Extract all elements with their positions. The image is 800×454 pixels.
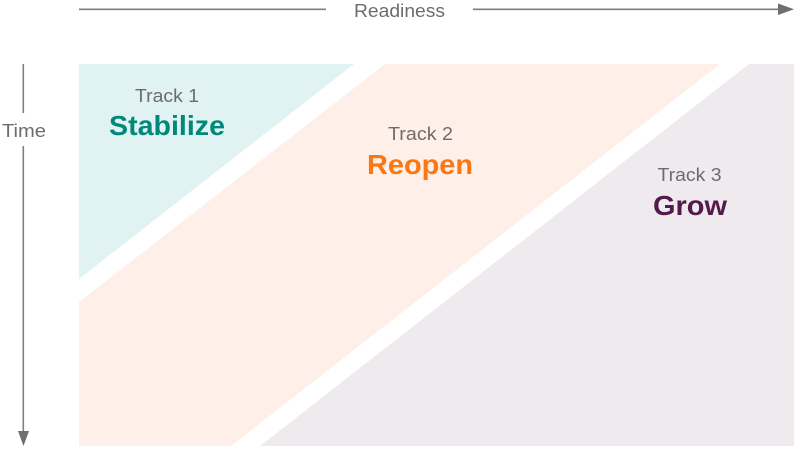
panel: track 2 reopen — [79, 64, 720, 446]
time axis arrow — [18, 64, 29, 446]
readiness axis arrow — [79, 4, 794, 15]
axis label: readiness: Readiness — [354, 1, 445, 21]
heading: reopen: Reopen — [367, 149, 473, 180]
heading: grow: Grow — [653, 190, 727, 221]
panel: track 1 stabilize — [79, 64, 354, 279]
heading: stabilize: Stabilize — [109, 110, 225, 141]
label: track 1: Track 1 — [135, 86, 199, 106]
label: track 3: Track 3 — [658, 165, 722, 185]
axis label: time: Time — [2, 121, 46, 141]
label: track 2: Track 2 — [388, 124, 453, 144]
panel: track 3 grow — [260, 64, 794, 446]
